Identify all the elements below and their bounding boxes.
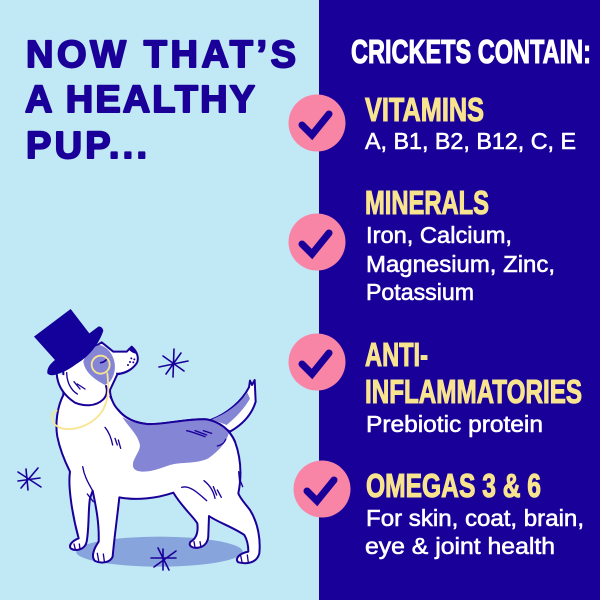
muzzle dots — [127, 357, 135, 366]
title: A HEALTHY — [25, 79, 255, 121]
fur and face marks — [67, 358, 248, 563]
item: omegas: eye & joint health — [365, 533, 555, 559]
ear — [57, 373, 107, 405]
item: minerals: Magnesium, Zinc, — [366, 251, 555, 277]
top hat — [34, 309, 103, 375]
item: anti-inflammatories: Prebiotic protein — [366, 411, 543, 437]
panel: crickets contain background — [319, 0, 600, 600]
item: vitamins: A, B1, B2, B12, C, E — [365, 128, 576, 154]
title — [25, 34, 296, 167]
icon: check vitamins — [288, 94, 346, 152]
item: minerals: MINERALS — [365, 184, 489, 221]
item: anti-inflammatories — [365, 336, 582, 437]
title: PUP... — [26, 125, 147, 167]
sparkle: bottom — [151, 548, 176, 570]
nose — [128, 348, 138, 354]
tail — [211, 380, 256, 432]
sparkle: left — [18, 468, 41, 490]
eye patch — [83, 345, 115, 385]
item: omegas: OMEGAS 3 & 6 — [366, 467, 541, 504]
item: minerals — [365, 184, 555, 305]
item: omegas: For skin, coat, brain, — [366, 505, 584, 531]
item: omegas — [365, 467, 584, 559]
icon: check anti-inflammatories — [288, 334, 346, 390]
item: anti-inflammatories: ANTI- — [365, 336, 428, 373]
item: vitamins — [365, 91, 576, 154]
illustration: dog with top hat and monocle — [34, 309, 260, 567]
icon: check minerals — [288, 214, 346, 270]
icon: check omegas — [294, 460, 350, 518]
item: minerals: Iron, Calcium, — [366, 222, 512, 248]
sparkle: near nose — [159, 349, 188, 377]
body patch — [122, 417, 229, 472]
item: minerals: Potassium — [366, 279, 474, 305]
item: vitamins: VITAMINS — [365, 91, 484, 128]
monocle and chain — [52, 356, 110, 429]
title: NOW THAT’S — [26, 34, 296, 76]
dog body — [56, 342, 260, 563]
back outline — [118, 410, 235, 442]
dog shadow — [76, 537, 243, 567]
